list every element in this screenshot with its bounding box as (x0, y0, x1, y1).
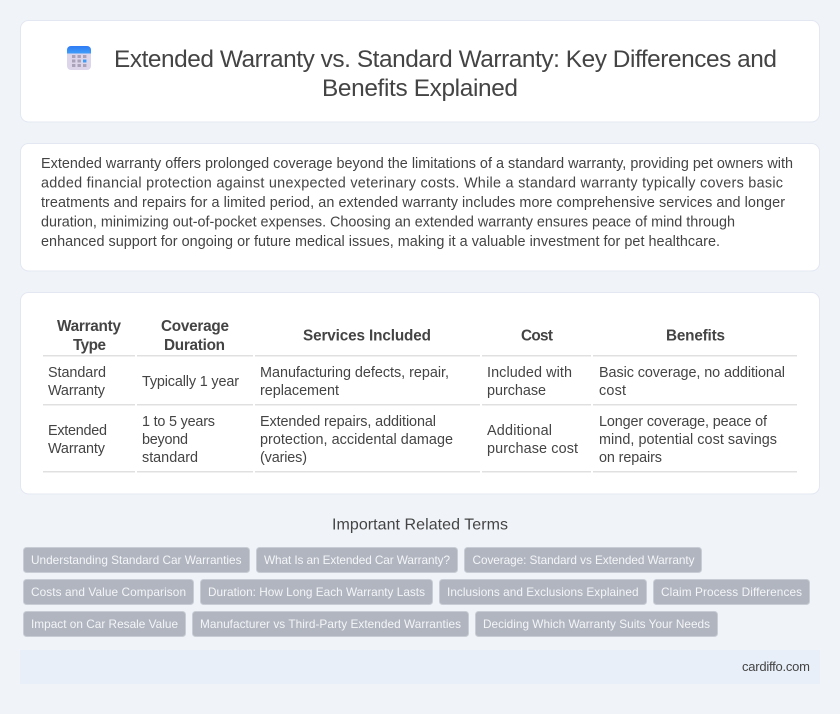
text block: description: Extended warranty offers prolonged coverage beyond the limitations of a standard warranty, providing pet owners with (41, 156, 793, 172)
table header row: Duration (164, 337, 225, 354)
table row: standard warranty: cost (599, 383, 626, 399)
panel: related term tags: What Is an Extended Car Warranty? (264, 553, 450, 567)
panel: related term tags: Impact on Car Resale Value (31, 617, 178, 631)
panel: related term tags: Claim Process Differences (661, 585, 802, 599)
footer (20, 650, 820, 684)
table header row: Cost (521, 328, 553, 344)
table row: standard warranty: Basic coverage, no additional (599, 365, 785, 381)
table header row: Coverage (161, 318, 229, 335)
table row: standard warranty: Manufacturing defects, repair, (260, 365, 449, 381)
icon: calendar (67, 46, 91, 70)
table row dividers (43, 355, 797, 472)
table row: extended warranty: Extended (48, 423, 107, 439)
text block: description: treatments and repairs for a limited period, an extended warranty includes more comprehensive services and longer (41, 195, 785, 211)
text block: description: duration, minimizing out-of-pocket expenses. Choosing an extended warranty ensures peace of mind through (41, 214, 735, 230)
panel: related term tags (24, 548, 810, 636)
table row: extended warranty: beyond (142, 432, 188, 448)
table header row: Warranty (57, 318, 121, 335)
table header row: Benefits (666, 328, 725, 344)
table row: extended warranty: Warranty (48, 441, 106, 457)
table row: standard warranty: Included with (487, 365, 572, 381)
table row: standard warranty: replacement (260, 383, 339, 399)
table row: extended warranty: protection, accidental damage (260, 432, 453, 448)
table row: extended warranty (48, 414, 777, 466)
title: Extended Warranty vs. Standard Warranty: Key Differences and (114, 46, 777, 73)
panel: related term tags: Inclusions and Exclusions Explained (447, 585, 638, 599)
table row: standard warranty: purchase (487, 383, 546, 399)
panel: related term tags: Coverage: Standard vs Extended Warranty (472, 553, 695, 567)
table row: standard warranty: Typically 1 year (142, 374, 239, 390)
text block: description: enhanced support for ongoing or future medical issues, making it a valuable investment for pet healthcare. (41, 234, 720, 250)
table header row: Services Included (303, 328, 431, 344)
table row: extended warranty: mind, potential cost savings (599, 432, 777, 448)
text block: description: added financial protection against unexpected veterinary costs. While a standard warranty typically covers basic (41, 176, 783, 192)
panel: comparison table (20, 292, 820, 494)
table header row (57, 318, 725, 354)
heading: important related terms: Important Related Terms (332, 516, 508, 534)
table header row: Type (73, 337, 106, 354)
panel: description (20, 144, 820, 271)
footer: cardiffo.com (742, 659, 810, 674)
table row: extended warranty: purchase cost (487, 441, 578, 457)
table row: extended warranty: Extended repairs, additional (260, 414, 436, 430)
title: Benefits Explained (322, 75, 518, 102)
text block: description (41, 156, 793, 250)
table row: extended warranty: 1 to 5 years (142, 414, 215, 430)
table row: standard warranty (48, 365, 785, 399)
panel: related term tags: Manufacturer vs Third-Party Extended Warranties (200, 617, 461, 631)
panel: related term tags: Deciding Which Warranty Suits Your Needs (483, 617, 710, 631)
table row: extended warranty: on repairs (599, 450, 662, 466)
table row: standard warranty: Warranty (48, 383, 106, 399)
panel: related term tags: Costs and Value Comparison (31, 585, 186, 599)
table row: extended warranty: (varies) (260, 450, 307, 466)
table row: standard warranty: Standard (48, 365, 106, 381)
panel: related term tags: Understanding Standard Car Warranties (31, 553, 242, 567)
table row: extended warranty: Longer coverage, peace of (599, 414, 768, 430)
title (114, 46, 777, 102)
panel: related term tags: Duration: How Long Each Warranty Lasts (208, 585, 425, 599)
panel: header (20, 20, 820, 122)
table row: extended warranty: standard (142, 450, 198, 466)
table row: extended warranty: Additional (487, 423, 552, 439)
